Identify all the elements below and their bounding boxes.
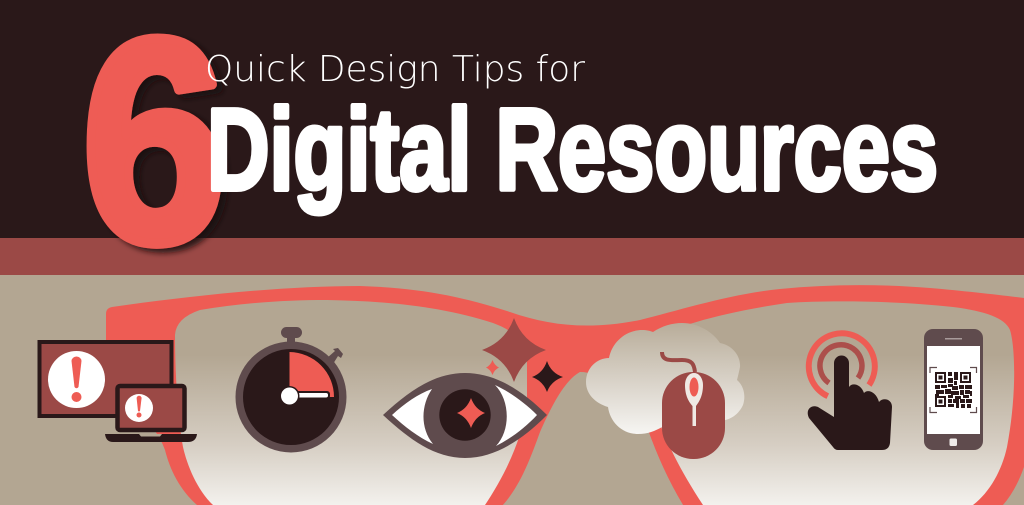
mouse: [662, 352, 725, 459]
QR brackets: [930, 368, 976, 412]
big sparkle: [482, 318, 546, 382]
icon: monitor and laptop warnings: [40, 342, 197, 442]
icon: touch hand: [808, 333, 892, 450]
QR code: [935, 372, 972, 408]
background: red band: [0, 238, 1024, 275]
glasses frame: [106, 285, 1024, 505]
monitor: [40, 342, 172, 416]
eye white right: [495, 385, 537, 446]
icon: eye with sparkles: [383, 318, 563, 458]
small sparkle: [486, 360, 499, 375]
eye outline: [383, 373, 547, 458]
left lens: [175, 300, 527, 505]
laptop: [105, 386, 197, 442]
icon: cloud with mouse: [586, 323, 744, 459]
icon: stopwatch: [236, 327, 346, 452]
title line: Quick Design Tips for: Quick Design Tips for: [205, 49, 585, 90]
icon: phone with QR code: [924, 329, 983, 450]
nose bridge gap: [503, 372, 683, 505]
background: tan lower area: [0, 275, 1024, 505]
background: dark header: [0, 0, 1024, 238]
dark sparkle: [532, 361, 563, 392]
pupil: [439, 389, 491, 441]
right lens: [645, 301, 1014, 505]
cloud: [586, 323, 744, 434]
eye white left: [392, 389, 433, 444]
